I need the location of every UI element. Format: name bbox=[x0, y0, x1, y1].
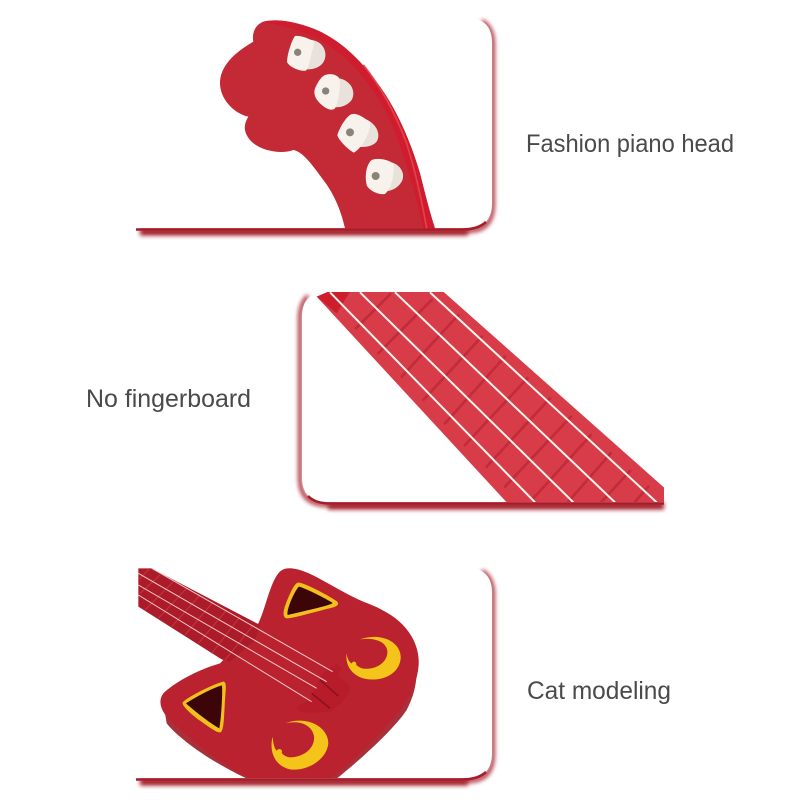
panel baseline bbox=[308, 496, 664, 504]
strings bbox=[330, 292, 657, 502]
right ear sound hole bbox=[183, 682, 226, 732]
panel shadow bbox=[140, 21, 493, 232]
guitar neck with strings and frets bbox=[317, 292, 665, 502]
tuning peg 1 bbox=[287, 36, 325, 71]
panel: cat modeling bbox=[136, 568, 493, 782]
icon: guitar headstock bbox=[220, 20, 435, 228]
neck bbox=[317, 292, 665, 502]
panel: fashion piano head bbox=[136, 18, 493, 232]
frets bbox=[356, 294, 648, 502]
panel background bbox=[302, 292, 664, 502]
crescent moon bbox=[346, 637, 401, 680]
panel background bbox=[138, 568, 492, 778]
cat guitar body bbox=[138, 568, 419, 780]
body top bbox=[160, 568, 419, 778]
panel shadow bbox=[300, 296, 664, 506]
crescent moon bbox=[272, 721, 328, 770]
panel baseline bbox=[136, 772, 486, 780]
caption: No fingerboard: No fingerboard bbox=[86, 385, 251, 413]
neck frets bbox=[138, 568, 253, 660]
neck bbox=[138, 568, 260, 662]
panel baseline bbox=[136, 222, 486, 230]
panel background bbox=[136, 18, 492, 228]
left ear sound hole bbox=[284, 583, 338, 618]
panel shadow bbox=[140, 571, 493, 782]
tuning peg 4 bbox=[366, 159, 403, 194]
caption: Fashion piano head: Fashion piano head bbox=[526, 130, 734, 158]
tuning peg 2 bbox=[314, 74, 353, 110]
body side bbox=[163, 673, 417, 780]
panel: no fingerboard bbox=[300, 292, 665, 506]
caption: Cat modeling: Cat modeling bbox=[527, 677, 671, 705]
bridge bbox=[311, 680, 339, 709]
tuning peg 3 bbox=[337, 114, 378, 153]
strings bbox=[138, 568, 333, 702]
